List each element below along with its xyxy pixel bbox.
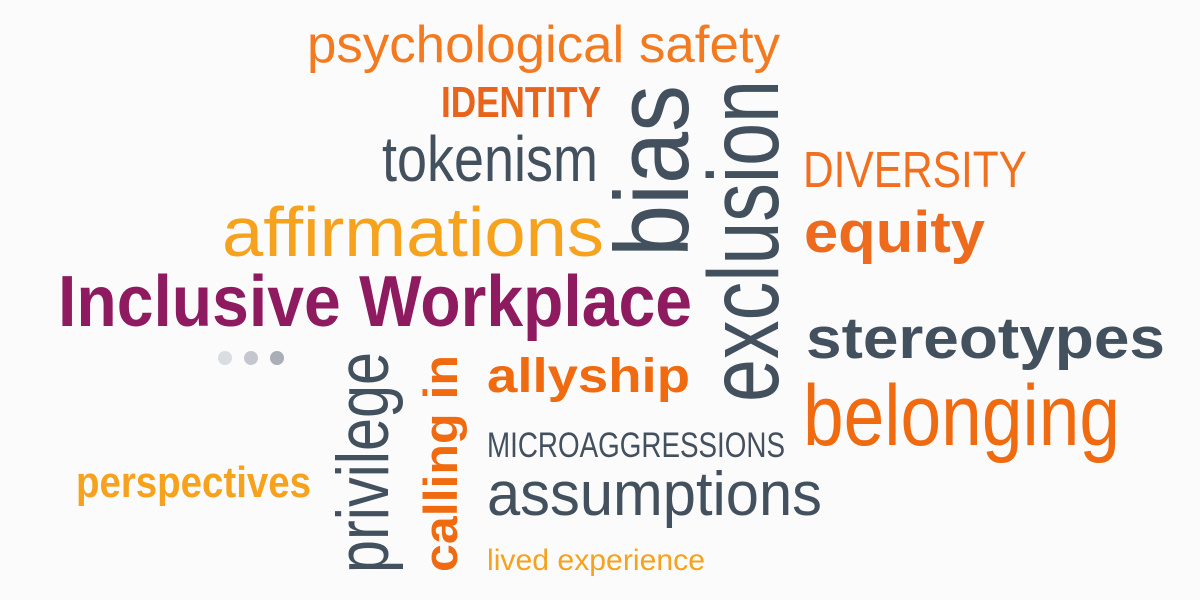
word: DIVERSITY: DIVERSITY [803,141,1027,198]
word: bias (vertical): bias [594,85,711,257]
word: belonging: belonging [803,368,1120,464]
word: IDENTITY: IDENTITY [441,78,601,127]
word: MICROAGGRESSIONS: MICROAGGRESSIONS [487,426,785,465]
word: psychological safety: psychological safety [307,16,780,74]
word: calling in (vertical): calling in [414,355,467,572]
word: tokenism: tokenism [382,123,598,195]
dots [218,351,284,365]
word: lived experience: lived experience [487,544,705,577]
word: allyship: allyship [487,350,690,403]
word: assumptions: assumptions [487,460,822,529]
word: perspectives: perspectives [76,458,311,507]
word: privilege (vertical): privilege [323,352,404,573]
word: affirmations: affirmations [222,193,604,271]
word: stereotypes: stereotypes [806,306,1165,371]
word: equity: equity [804,200,985,265]
word: Inclusive Workplace: Inclusive Workplace [58,262,692,342]
